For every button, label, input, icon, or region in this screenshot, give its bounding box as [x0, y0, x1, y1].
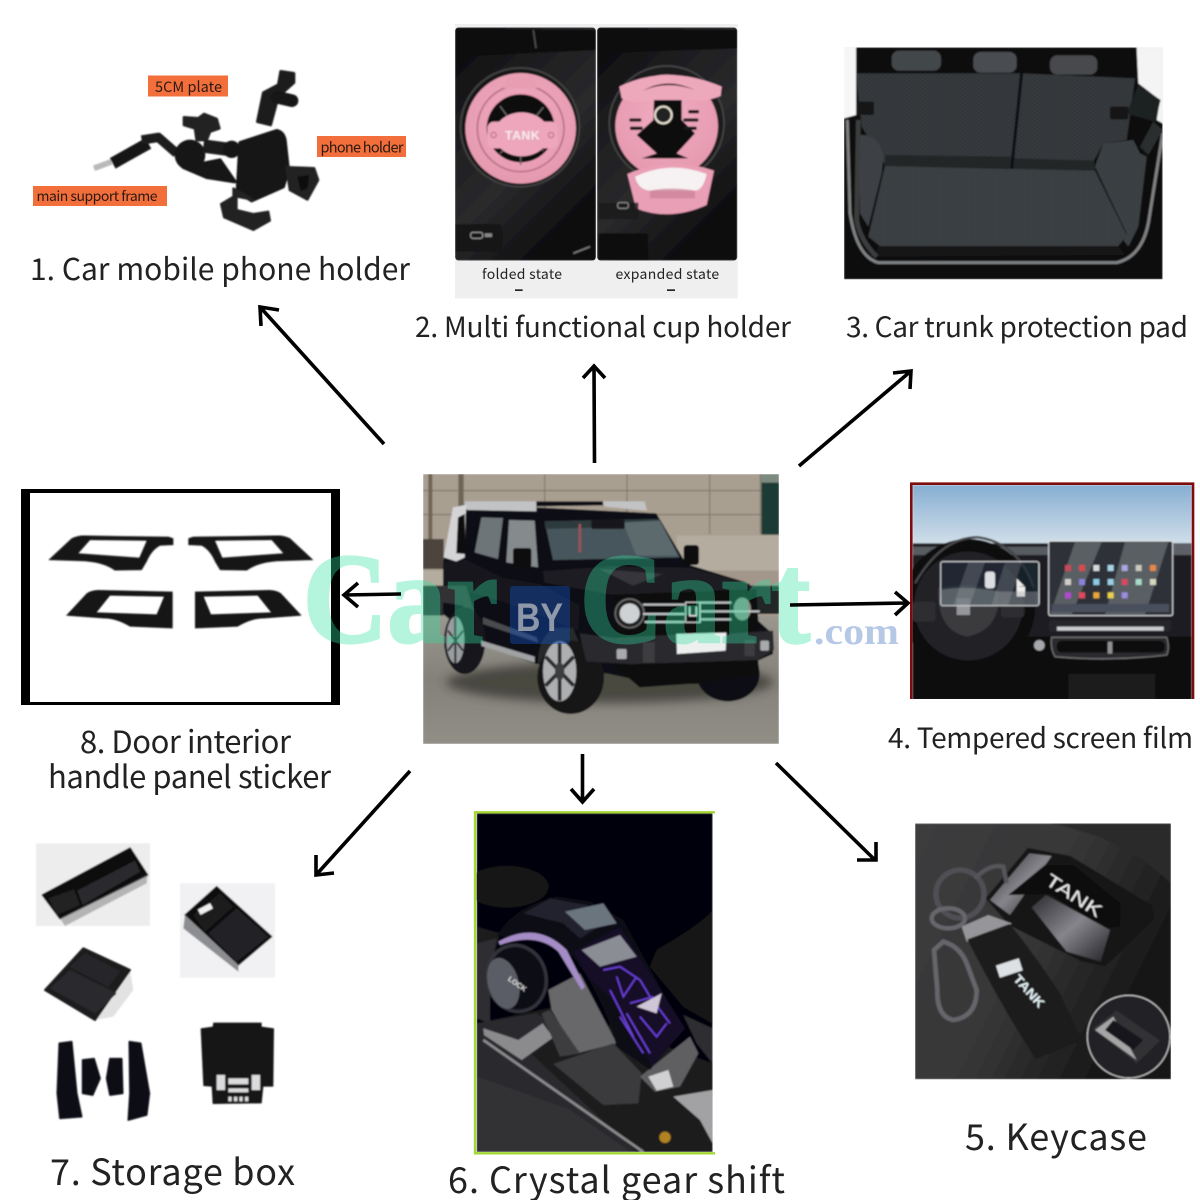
- arrow: to door handle sticker: [344, 583, 401, 607]
- arrow: to trunk pad: [799, 371, 911, 466]
- watermark: CarByCart.com: Car: [303, 528, 498, 670]
- windows: [545, 519, 680, 560]
- arrow: to keycase: [776, 763, 876, 860]
- panel 3: car trunk protection pad: [844, 47, 1188, 346]
- centre: SUV photo: [423, 474, 779, 744]
- watermark: CarByCart.com: [303, 528, 899, 670]
- tray: door pockets: [57, 1042, 149, 1120]
- panel 5: keycase: [915, 823, 1171, 1161]
- grille and bumper: [613, 589, 759, 639]
- label: phone holder: phone holder: [320, 136, 404, 158]
- gear shift photo: LOCK: [506, 974, 529, 994]
- front wheel: [537, 628, 580, 664]
- photo: folded state: [455, 27, 596, 261]
- roof rack: [465, 501, 536, 511]
- right front wheel: [698, 670, 760, 702]
- title 5: 5. Keycase: [965, 1109, 1147, 1161]
- watermark: CarByCart.com: BY: [516, 596, 563, 640]
- keycase photo: TANK: [1010, 972, 1048, 1011]
- tray: long: [36, 843, 150, 926]
- watermark: CarByCart.com: Cart: [580, 528, 810, 670]
- title 4: 4. Tempered screen film: [888, 717, 1193, 757]
- title 3: 3. Car trunk protection pad: [846, 306, 1188, 346]
- title 7: 7. Storage box: [50, 1144, 295, 1196]
- cup holder photos: [455, 24, 738, 298]
- photo: folded state: TANK: [505, 128, 540, 142]
- title 8: handle panel sticker: [48, 752, 332, 797]
- panel 8: door interior handle panel sticker: [21, 489, 340, 797]
- title 8: 8. Door interior: [80, 717, 292, 762]
- arrow: to screen film: [790, 592, 908, 615]
- black frame: [21, 489, 340, 705]
- panel 6: crystal gear shift: [448, 812, 785, 1200]
- photo: expanded state: [597, 27, 737, 261]
- title 1: 1. Car mobile phone holder: [30, 245, 410, 289]
- car body: [443, 507, 773, 684]
- caption: expanded state: expanded state: [615, 264, 719, 284]
- handle panels: [48, 536, 313, 628]
- tray: centre console: [201, 1023, 274, 1104]
- tray: flat: [45, 948, 133, 1020]
- storage box photos: [36, 843, 275, 1120]
- panel 7: storage box: [36, 843, 295, 1196]
- tray: square: [180, 883, 275, 978]
- holder photo: [94, 71, 318, 230]
- arrow: to crystal gear shift: [571, 754, 594, 802]
- gear shift photo: [465, 812, 715, 1153]
- watermark: CarByCart.com: .com: [814, 611, 899, 653]
- title 8: [48, 717, 332, 797]
- arrow: to car phone holder: [260, 307, 384, 444]
- keycase photo: [915, 823, 1171, 1079]
- panel 4: tempered screen film: [888, 484, 1193, 757]
- trunk photo: [844, 47, 1163, 279]
- label: main support frame: main support frame: [36, 186, 158, 206]
- keycase photo: TANK: [1042, 870, 1106, 921]
- arrow: to cup holder: [583, 366, 605, 463]
- rear wheel: [442, 584, 476, 612]
- title 2: 2. Multi functional cup holder: [415, 306, 791, 346]
- caption: folded state: folded state: [482, 264, 562, 284]
- panel 2: multi functional cup holder: [415, 24, 791, 346]
- panel 1: car mobile phone holder: [30, 71, 410, 289]
- arrow: to storage box: [316, 771, 410, 875]
- dashboard photo: [908, 484, 1193, 700]
- label: 5CM plate: 5CM plate: [155, 76, 222, 97]
